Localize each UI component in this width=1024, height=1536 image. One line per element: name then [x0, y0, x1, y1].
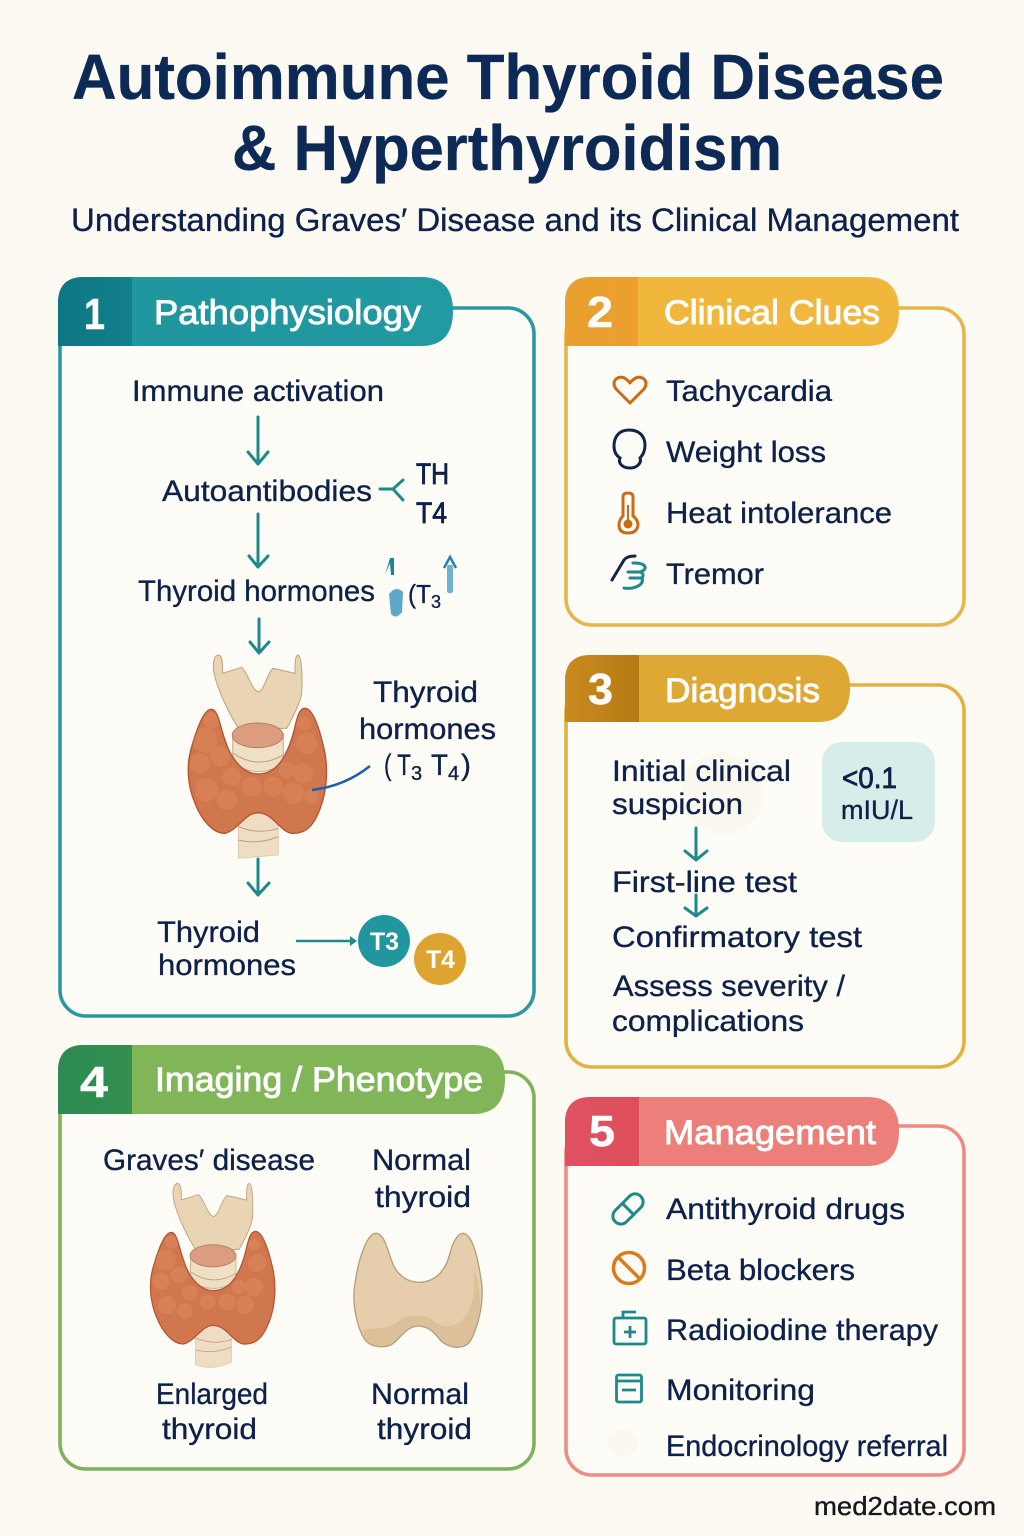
- badge: T4: T4: [426, 946, 455, 974]
- text: TH T4: T4: [416, 497, 447, 530]
- header: management: 5: [589, 1107, 615, 1156]
- title: Autoimmune Thyroid Disease: [72, 41, 944, 113]
- callout: thyroid hormones T3 T4: 3: [411, 763, 422, 785]
- icon: hand tremor: [612, 556, 645, 588]
- illustration: enlarged thyroid gland: [188, 655, 327, 858]
- panel: diagnosis: [565, 655, 964, 1067]
- icon: clipboard: [616, 1375, 642, 1402]
- header: diagnosis: Diagnosis: [665, 672, 820, 710]
- footer: source: med2date.com: [814, 1491, 996, 1521]
- header: management: Management: [664, 1114, 877, 1152]
- panel: clinical clues: [565, 277, 964, 625]
- callout: TSH value: [822, 742, 935, 842]
- panel: imaging / phenotype: [58, 1045, 534, 1469]
- header: management: [565, 1097, 899, 1166]
- icon: antibody connector: [380, 480, 403, 500]
- text: immune activation: Immune activation: [132, 375, 384, 408]
- text: first-line test: First-line test: [612, 866, 798, 899]
- icon: medical case: [614, 1312, 646, 1344]
- arrow: [249, 514, 268, 567]
- title: & Hyperthyroidism: [232, 112, 782, 184]
- callout: TSH value: mIU/L: [841, 795, 913, 825]
- text: normal thyroid caption: thyroid: [377, 1413, 472, 1446]
- header: imaging / phenotype: Imaging / Phenotype: [155, 1061, 483, 1099]
- arrow: [685, 895, 707, 916]
- text: initial clinical suspicion: suspicion: [612, 788, 743, 821]
- text: thyroid hormones output: Thyroid: [157, 916, 260, 949]
- text: radioiodine therapy: Radioiodine therapy: [666, 1314, 938, 1347]
- text: autoantibodies: Autoantibodies: [162, 475, 372, 508]
- icon: head: [614, 430, 645, 468]
- icon: hormone rise marks: [385, 557, 456, 617]
- subtitle: Understanding Graves′ Disease and its Clinical Management: [71, 202, 959, 238]
- text: TH T4: [416, 458, 449, 530]
- callout: TSH value: <0.1: [842, 762, 897, 795]
- text: normal thyroid caption: [371, 1378, 472, 1446]
- icon: pill: [610, 1191, 646, 1227]
- icon: hormone rise marks: 3: [431, 592, 441, 612]
- header: pathophysiology: [58, 277, 453, 346]
- arrow: [250, 619, 269, 653]
- text: weight loss: Weight loss: [666, 436, 826, 469]
- faint watermark circle: [682, 752, 764, 834]
- callout: thyroid hormones T3 T4: ): [461, 749, 471, 782]
- text: assess severity: [612, 970, 846, 1038]
- callout line: [312, 766, 370, 790]
- arrow: [248, 417, 268, 464]
- header: clinical clues: Clinical Clues: [664, 294, 880, 332]
- text: normal thyroid heading: thyroid: [375, 1181, 471, 1214]
- text: Graves' disease: Graves′ disease: [103, 1144, 315, 1177]
- text: enlarged thyroid: [156, 1378, 268, 1446]
- text: monitoring: Monitoring: [666, 1374, 815, 1407]
- title: [72, 41, 944, 184]
- text: normal thyroid caption: Normal: [371, 1378, 469, 1411]
- header: pathophysiology: 1: [84, 290, 105, 339]
- text: TH T4: TH: [416, 458, 449, 491]
- text: normal thyroid heading: Normal: [372, 1144, 471, 1177]
- icon: heart: [614, 377, 646, 403]
- text: enlarged thyroid: thyroid: [162, 1413, 257, 1446]
- icon: no symbol: [614, 1252, 644, 1284]
- text: confirmatory test: Confirmatory test: [612, 921, 863, 954]
- icon: thermometer: [619, 493, 638, 533]
- panel: management: [565, 1097, 964, 1475]
- text: thyroid hormones: Thyroid hormones: [138, 575, 375, 608]
- badge: T3: T3: [370, 928, 399, 956]
- text: assess severity: Assess severity /: [613, 970, 846, 1003]
- text: assess severity: complications: [612, 1005, 804, 1038]
- callout: thyroid hormones T3 T4: [359, 676, 496, 785]
- text: tachycardia: Tachycardia: [666, 375, 832, 408]
- callout: thyroid hormones T3 T4: 4: [448, 763, 459, 785]
- icon: hormone rise marks: (T: [408, 579, 431, 609]
- text: endocrinology referral: Endocrinology referral: [666, 1430, 948, 1463]
- header: imaging / phenotype: [58, 1045, 505, 1114]
- callout: thyroid hormones T3 T4: hormones: [359, 713, 496, 746]
- arrow: [248, 859, 269, 895]
- text: heat intolerance: Heat intolerance: [666, 497, 892, 530]
- header: clinical clues: 2: [587, 288, 613, 337]
- text: thyroid hormones output: hormones: [158, 949, 296, 982]
- callout: thyroid hormones T3 T4: ( T: [384, 749, 411, 782]
- text: beta blockers: Beta blockers: [666, 1254, 855, 1287]
- faint smudge: [607, 1430, 639, 1456]
- header: pathophysiology: Pathophysiology: [154, 294, 421, 332]
- panel: pathophysiology: [58, 277, 534, 1016]
- illustration: normal thyroid: [354, 1233, 482, 1347]
- header: diagnosis: [565, 655, 850, 722]
- text: antithyroid drugs: Antithyroid drugs: [666, 1193, 905, 1226]
- text: thyroid hormones output: [157, 916, 296, 982]
- text: normal thyroid heading: [372, 1144, 471, 1214]
- arrow: [685, 828, 707, 860]
- text: tremor: Tremor: [666, 558, 764, 591]
- badge: T4: [414, 933, 466, 985]
- text: initial clinical suspicion: [612, 755, 791, 821]
- header: clinical clues: [565, 277, 899, 346]
- illustration: enlarged thyroid: [150, 1184, 275, 1367]
- arrow: [296, 936, 357, 946]
- text: enlarged thyroid: Enlarged: [156, 1378, 268, 1411]
- header: diagnosis: 3: [588, 665, 613, 714]
- callout: thyroid hormones T3 T4: T: [431, 749, 448, 782]
- header: imaging / phenotype: 4: [80, 1058, 109, 1107]
- callout: thyroid hormones T3 T4: Thyroid: [373, 676, 478, 709]
- text: initial clinical suspicion: Initial clinical: [612, 755, 791, 788]
- badge: T3: [358, 915, 410, 967]
